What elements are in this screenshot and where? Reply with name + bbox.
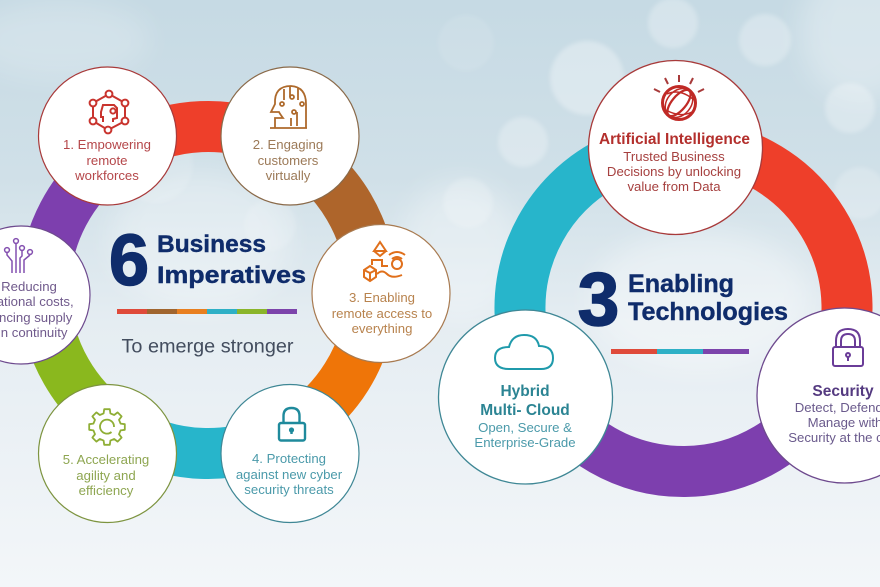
- circle: hybrid multi-cloud: [438, 310, 612, 484]
- circle 5: accelerating agility: [38, 384, 176, 522]
- icon: network head: [90, 91, 128, 133]
- circle: artificial intelligence: value from Data: [627, 179, 721, 194]
- label: 1. Empowering: [63, 137, 151, 152]
- label: [236, 451, 343, 497]
- label: remote: [86, 153, 128, 168]
- circle: artificial intelligence: [588, 60, 762, 234]
- icon: cube and signal: [364, 242, 405, 281]
- label: Artificial Intelligence: [599, 131, 750, 148]
- label: 3. Enabling: [349, 290, 415, 305]
- label: 4. Protecting: [252, 451, 326, 466]
- label: everything: [352, 321, 412, 336]
- label: against new cyber: [236, 467, 343, 482]
- title: 6 business imperatives: Imperatives: [157, 262, 306, 289]
- icon: globe with rays: [654, 75, 704, 123]
- title: 3 enabling technologies: Technologies: [628, 298, 788, 326]
- label: workforces: [74, 168, 139, 183]
- label: Security: [812, 383, 874, 400]
- circle: artificial intelligence: Decisions by unlocking: [607, 164, 741, 179]
- ring: six business imperatives: [45, 126, 372, 454]
- title: 6 business imperatives: [109, 221, 306, 301]
- label: Reducing: [1, 279, 57, 294]
- label: [63, 137, 151, 183]
- title: 3 enabling technologies: Enabling: [628, 270, 734, 298]
- label: [480, 383, 570, 419]
- label: remote access to: [332, 306, 432, 321]
- circle: artificial intelligence: Trusted Business: [623, 149, 725, 164]
- circle 1: empowering remote workforces: [38, 67, 176, 205]
- circle 2: engaging customers virtually: [221, 67, 359, 205]
- label: efficiency: [79, 483, 134, 498]
- label: agility and: [76, 468, 136, 483]
- label: Hybrid: [500, 383, 550, 400]
- icon: cloud: [495, 335, 553, 369]
- title: 3 enabling technologies: 3: [578, 257, 619, 341]
- circle 6: reducing operational costs: [0, 226, 90, 364]
- icon: AI head: [270, 86, 307, 128]
- title: 3 enabling technologies: [578, 257, 788, 341]
- label: [0, 279, 74, 340]
- circle 4: protecting against threats: [221, 384, 359, 522]
- colour bar: six segments: [117, 309, 297, 314]
- circle: hybrid multi-cloud: Enterprise-Grade: [474, 435, 576, 450]
- subtitle: To emerge stronger: [122, 336, 294, 358]
- label: security threats: [244, 482, 334, 497]
- circle: security: [757, 308, 880, 483]
- label: 5. Accelerating: [63, 452, 149, 467]
- icon: gear: [89, 409, 125, 445]
- title: 6 business imperatives: Business: [157, 231, 266, 258]
- label: Multi- Cloud: [480, 402, 570, 419]
- colour bar: three segments: [611, 349, 749, 354]
- circle 3: enabling remote access: [312, 224, 450, 362]
- icon: circuit: [5, 239, 32, 273]
- circle: hybrid multi-cloud: Open, Secure &: [478, 420, 572, 435]
- label: customers: [258, 153, 319, 168]
- label: [63, 452, 149, 498]
- label: [253, 137, 323, 183]
- ring: three enabling technologies: [520, 144, 847, 472]
- label: virtually: [266, 168, 311, 183]
- icon: padlock: [833, 329, 863, 366]
- title: 6 business imperatives: 6: [109, 221, 149, 301]
- icon: padlock: [279, 408, 305, 440]
- label: [332, 290, 432, 336]
- label: 2. Engaging: [253, 137, 323, 152]
